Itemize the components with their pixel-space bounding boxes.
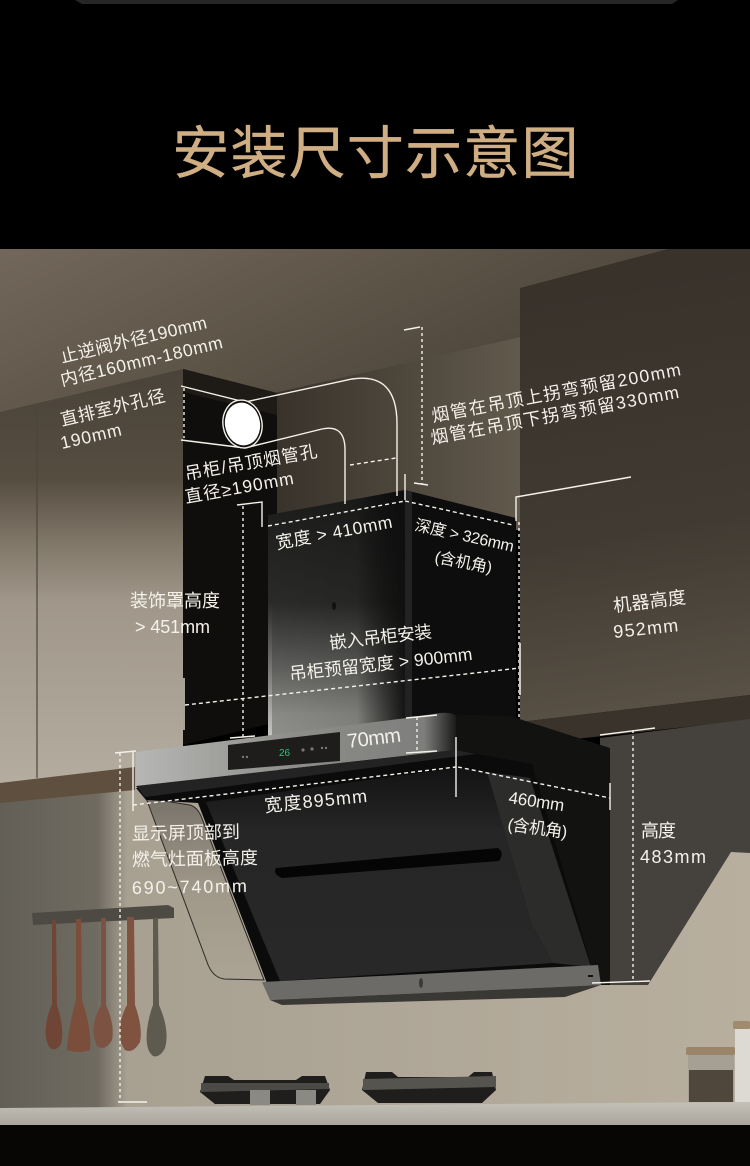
corner tick (404, 474, 406, 500)
glass panel (206, 768, 553, 981)
range hood (136, 713, 610, 1005)
cover logo (332, 602, 336, 610)
label: cover height (130, 591, 220, 637)
label: outdoor hole (58, 385, 167, 453)
vertical ticks (133, 737, 610, 811)
left cooktop burner (200, 1076, 330, 1105)
hanging utensil rack (32, 905, 174, 1056)
left cabinet bottom band (0, 767, 135, 803)
left glass wing (146, 798, 264, 980)
display digits: 26 (279, 748, 291, 759)
label: display to cooktop height: 燃气灶面板高度 (132, 848, 258, 870)
label: depth 460: (含机角) (506, 815, 568, 842)
cover side face (405, 490, 516, 720)
right cabinet bottom band (520, 695, 750, 745)
ceiling (0, 249, 750, 429)
label: check valve diameter: 止逆阀外径190mm (58, 312, 209, 367)
326 depth dash (405, 501, 513, 525)
label: check valve diameter: 内径160mm-180mm (58, 332, 224, 390)
label: duct hole: 直径≥190mm (183, 468, 295, 507)
label: depth 326: 深度 > 326mm (413, 516, 516, 556)
back wall (270, 336, 525, 530)
label: depth 460 (506, 788, 568, 842)
right cooktop burner (362, 1072, 496, 1103)
label: outdoor hole: 直排室外孔径 (58, 385, 167, 430)
background: black header (0, 0, 750, 250)
label: cabinet install: 嵌入吊柜安装 (328, 621, 433, 653)
tall jar (733, 1021, 750, 1102)
label: height 483 (640, 821, 706, 867)
previous product strip (75, 0, 678, 4)
air slot (275, 848, 502, 878)
left cabinets (0, 369, 183, 790)
690-740 height (115, 751, 147, 1102)
label: height 483: 高度 (641, 821, 676, 841)
utensil shadow (147, 918, 167, 1056)
label: machine height (612, 587, 687, 642)
label: duct hole: 吊柜/吊顶烟管孔 (183, 441, 319, 484)
cover height dashes (242, 506, 244, 738)
cabinet seam (36, 404, 38, 778)
steel fascia (136, 713, 456, 786)
label: 70mm: 70mm (346, 725, 402, 753)
label: cover height: 装饰罩高度 (130, 591, 220, 611)
70mm height (406, 715, 437, 753)
483 height (592, 728, 655, 983)
cover front face (268, 490, 405, 740)
spoon 2 (67, 919, 90, 1052)
duct hole circle (219, 397, 266, 451)
hood dark frame (136, 750, 592, 986)
lower steel strip (262, 965, 601, 1000)
right glass facet (487, 772, 591, 967)
spoon 1 (46, 920, 62, 1049)
spice jar (686, 1047, 735, 1102)
spoon 3 (93, 918, 113, 1048)
label: depth 326 (413, 516, 516, 577)
label: width 410: 宽度 > 410mm (274, 512, 394, 553)
left cabinet side (183, 369, 277, 745)
lower wall (0, 770, 750, 1110)
label: display to cooktop height: 690~740mm (132, 876, 247, 898)
machine height bracket (516, 477, 631, 720)
label: display to cooktop height (132, 822, 258, 898)
cover bottom tick (230, 736, 255, 738)
label: outdoor hole: 190mm (58, 419, 123, 453)
460 depth dash (458, 767, 610, 798)
hood black body (440, 714, 610, 985)
rack bar (32, 905, 174, 925)
label: machine height: 952mm (612, 615, 679, 642)
label: cabinet install (288, 621, 473, 684)
right cabinets (520, 249, 750, 722)
900 width line (184, 643, 520, 730)
label: height 483: 483mm (640, 847, 706, 867)
spoon 4 (120, 917, 141, 1051)
duct outer line (181, 378, 397, 496)
895 width dash (133, 767, 456, 805)
dimension lines (115, 327, 655, 1102)
dashed hole diameter (183, 388, 185, 438)
decorative cover (268, 490, 516, 740)
counter base (0, 1125, 750, 1166)
duct inner line (181, 428, 345, 504)
cover bracket (237, 502, 262, 527)
label: duct bend reservation: 烟管在吊顶下拐弯预留330mm (429, 382, 680, 448)
top reservation height (404, 327, 428, 485)
wall shadow on right (600, 719, 750, 985)
counter top (0, 1102, 750, 1125)
duct offset dash (350, 458, 396, 465)
label: depth 326: (含机角) (433, 548, 494, 577)
title: 安装尺寸示意图 (172, 122, 580, 186)
display panel (228, 732, 340, 770)
label: cover height: > 451mm (135, 617, 210, 637)
410 width dash (268, 501, 405, 526)
panel: kitchen scene (0, 249, 750, 1166)
label: cabinet install: 吊柜预留宽度 > 900mm (288, 644, 473, 684)
label: depth 460: 460mm (507, 788, 566, 815)
label: width 895: 宽度895mm (263, 786, 368, 816)
label: display to cooktop height: 显示屏顶部到 (132, 822, 240, 844)
label: machine height: 机器高度 (612, 587, 687, 616)
label: duct hole (183, 441, 319, 507)
lower logo (419, 978, 423, 988)
label: duct bend reservation: 烟管在吊顶上拐弯预留200mm (430, 359, 682, 426)
